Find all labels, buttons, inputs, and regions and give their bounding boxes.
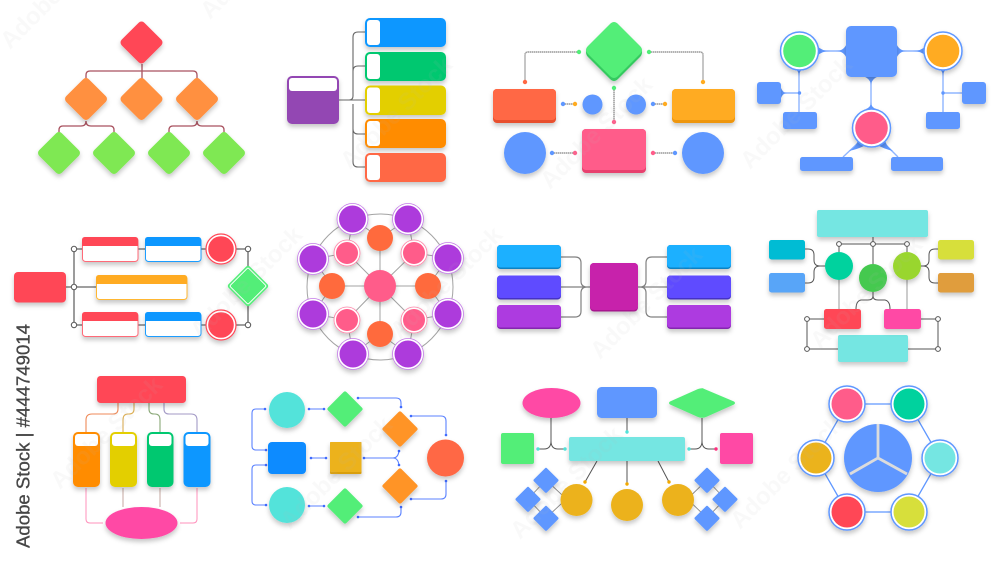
blue diamonds	[515, 467, 738, 531]
lower connectors	[86, 488, 197, 523]
teal bar	[569, 437, 685, 461]
red start box	[14, 272, 66, 302]
watermark text: Adobe Stock	[585, 241, 708, 364]
flowchart shapes	[493, 22, 735, 174]
panel: teal header with three circles	[769, 210, 974, 362]
teal header and base blocks	[817, 210, 928, 362]
vertical grey links	[839, 280, 907, 309]
tree diamonds	[36, 20, 247, 176]
blue and yellow squares	[268, 442, 362, 474]
panel: hexagonal ring with pie	[798, 386, 958, 530]
panel: central teal bar with shapes	[501, 387, 753, 531]
red circle	[427, 440, 464, 476]
purple ringed nodes	[298, 204, 464, 370]
five labelled bars	[365, 18, 446, 182]
green decision diamond	[227, 265, 269, 307]
circuit connectors	[805, 237, 938, 349]
diamond cluster links	[528, 480, 725, 518]
watermark text: Adobe Stock	[275, 411, 398, 534]
panel: red header with four capsules	[73, 376, 210, 539]
branch connectors	[339, 32, 365, 167]
watermark text: Adobe Stock	[725, 411, 848, 534]
connector dots	[523, 50, 705, 155]
side tags	[769, 240, 974, 329]
arrow heads	[264, 397, 447, 518]
watermark text: Adobe Stock	[805, 231, 928, 354]
network ring and spokes	[307, 214, 453, 360]
dotted connectors	[525, 52, 703, 153]
panel: magenta hub with mirrored bars	[497, 245, 731, 329]
small pink ringed nodes	[334, 240, 427, 333]
grey stems	[538, 418, 716, 484]
green circles	[825, 252, 921, 292]
top shapes	[501, 387, 753, 464]
panel: branching process with decision diamond	[14, 234, 269, 340]
panel: radial network	[298, 204, 464, 370]
watermark text: Adobe Stock	[335, 51, 458, 174]
pink ellipse	[106, 507, 178, 539]
ringed circles	[798, 386, 958, 530]
red ringed circles	[206, 234, 236, 340]
watermark text: Adobe Stock	[505, 421, 628, 544]
watermark text: Adobe Stock	[535, 71, 658, 194]
junction nodes	[71, 246, 251, 328]
panel: decision tree of diamonds	[36, 20, 247, 176]
teal circles	[269, 392, 305, 523]
hexagon links	[816, 404, 940, 512]
yellow circles	[560, 484, 694, 521]
orange diamonds	[382, 411, 418, 504]
bracket connectors	[561, 257, 667, 317]
panel: flowchart with blue arrows	[252, 391, 464, 524]
watermark text: Adobe Stock	[735, 51, 858, 174]
magenta hub	[590, 263, 638, 312]
ringed circles	[780, 32, 962, 147]
purple source box	[287, 76, 339, 124]
four capsules	[73, 432, 210, 487]
stock id sidebar text: Adobe Stock | #444749014	[14, 324, 34, 548]
central pink node	[364, 270, 396, 302]
connector flares	[781, 43, 948, 151]
central pie	[844, 424, 912, 492]
open junction nodes	[805, 242, 940, 351]
left and right bars	[497, 245, 731, 329]
process connectors	[66, 249, 248, 325]
watermark text: Adobe Stock	[385, 221, 508, 344]
panel: purple box to five coloured bars	[287, 18, 446, 182]
hub connectors	[781, 51, 962, 157]
orange nodes	[319, 225, 441, 347]
upper connectors	[86, 403, 197, 433]
panel: blue hub with ringed circles	[757, 26, 986, 171]
green diamonds	[327, 391, 363, 524]
hub and satellite boxes	[757, 26, 986, 171]
watermark text: Adobe Stock	[185, 221, 308, 344]
red header box	[97, 376, 186, 403]
stem dots	[536, 430, 718, 486]
tree connectors	[59, 64, 224, 133]
watermark text: Adobe Stock	[45, 371, 168, 494]
blue arrows	[252, 398, 446, 517]
panel: flowchart with dotted connectors	[493, 22, 735, 174]
header boxes	[82, 237, 201, 336]
